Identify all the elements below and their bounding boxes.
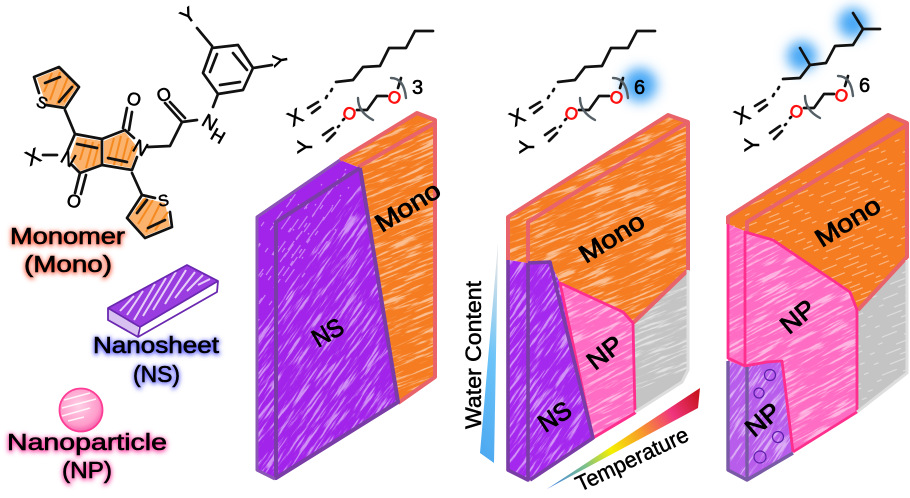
legend: monomer label: Monomer bbox=[10, 224, 125, 250]
formula panel 1: X and Y chains: O bbox=[385, 86, 404, 109]
atom labels: H bbox=[207, 124, 229, 148]
ring hatching bbox=[44, 72, 168, 232]
legend: nanoparticle label bbox=[7, 429, 167, 484]
legend: nanosheet label bbox=[93, 332, 220, 388]
atom labels: Y bbox=[177, 3, 200, 29]
region: grey empty bbox=[858, 262, 906, 409]
arrow: temperature gradient wedge bbox=[547, 388, 700, 489]
region: grey empty bbox=[633, 270, 688, 412]
formula panel 2: X and Y chains: 6 bbox=[634, 77, 645, 99]
legend: monomer label bbox=[10, 223, 125, 278]
label: NS: NS bbox=[307, 313, 349, 353]
atom labels: N bbox=[57, 147, 79, 172]
label: Mono: Mono bbox=[370, 176, 446, 238]
formula panel 3: branched X and Y chains: X bbox=[731, 102, 754, 129]
phase diagram 2 bbox=[508, 115, 688, 480]
atom labels: N bbox=[129, 136, 151, 161]
legend: monomer label: (Mono) bbox=[24, 251, 112, 277]
formula panel 1: X and Y chains: Y bbox=[294, 140, 317, 154]
atom labels: S bbox=[34, 94, 50, 113]
atom labels: O bbox=[125, 88, 143, 111]
label: Mono: Mono bbox=[574, 207, 650, 269]
region: NP bbox=[728, 224, 857, 452]
formula panel 2: X and Y chains: X bbox=[506, 104, 529, 131]
formula panel 2: X and Y chains: Y bbox=[516, 140, 539, 154]
icon: nanosheet bbox=[108, 265, 218, 337]
formula panel 3: branched X and Y chains: O bbox=[787, 100, 806, 123]
legend: nanoparticle label: (NP) bbox=[62, 457, 112, 483]
icon: nanoparticle bbox=[60, 388, 102, 432]
molecular bonds bbox=[34, 28, 272, 238]
monomer molecule bbox=[22, 3, 293, 238]
atom labels: Y bbox=[269, 52, 293, 69]
formula panel 2: X and Y chains: O bbox=[607, 86, 626, 109]
region: NS bbox=[508, 260, 593, 480]
label: NP: NP bbox=[581, 330, 629, 376]
label: small NP: NP bbox=[740, 397, 786, 443]
edges bbox=[508, 115, 688, 480]
atom labels: O bbox=[154, 83, 174, 106]
phase diagram 3 bbox=[726, 113, 909, 482]
legend: nanosheet label: (NS) bbox=[133, 361, 180, 387]
formula panel 2: X and Y chains bbox=[506, 31, 657, 154]
edges bbox=[728, 115, 907, 480]
hatched orange rings bbox=[37, 69, 170, 236]
atom labels: S bbox=[157, 192, 170, 211]
formula panel 1: X and Y chains: X bbox=[284, 104, 307, 131]
formula panel 1: X and Y chains: O bbox=[340, 102, 359, 125]
legend: monomer label: Monomer bbox=[10, 223, 125, 249]
region: NS bbox=[258, 160, 396, 477]
label: Water Content: Water Content bbox=[461, 281, 486, 429]
legend: nanoparticle label: Nanoparticle bbox=[7, 430, 167, 456]
formula panel 1: X and Y chains bbox=[284, 31, 433, 154]
atom labels: O bbox=[65, 190, 83, 213]
label: Temperature: Temperature bbox=[571, 422, 692, 497]
legend: monomer label: (Mono) bbox=[24, 252, 112, 278]
region: NP bbox=[560, 283, 635, 438]
formula panel 3: branched X and Y chains: O bbox=[832, 84, 851, 107]
formula panel 3: branched X and Y chains: Y bbox=[741, 138, 764, 152]
legend: nanosheet label: Nanosheet bbox=[93, 333, 220, 359]
legend: nanosheet label: Nanosheet bbox=[93, 332, 220, 358]
label: NP: NP bbox=[775, 294, 821, 340]
atom labels bbox=[22, 3, 293, 213]
small nanoparticle circles bbox=[754, 370, 784, 463]
arrow: water content gradient wedge bbox=[480, 243, 498, 463]
formula panel 1: X and Y chains: 3 bbox=[412, 77, 423, 99]
formula panel 3: branched X and Y chains: 6 bbox=[859, 75, 870, 97]
formula panel 3: branched X and Y chains bbox=[731, 8, 880, 152]
atom labels: N bbox=[198, 111, 220, 136]
phase diagram 1 bbox=[241, 113, 446, 479]
legend: nanoparticle label: Nanoparticle bbox=[7, 429, 167, 455]
region: Mono bbox=[340, 113, 435, 403]
label: Mono: Mono bbox=[810, 191, 886, 253]
region: Mono bbox=[729, 117, 905, 308]
edges bbox=[257, 113, 435, 479]
legend: nanosheet label: (NS) bbox=[133, 362, 180, 388]
label: NS: NS bbox=[533, 396, 577, 438]
region: Mono bbox=[508, 115, 688, 323]
legend: nanoparticle label: (NP) bbox=[62, 458, 112, 484]
atom labels: X bbox=[22, 144, 44, 171]
region: NS with nanoparticles bbox=[728, 361, 793, 480]
formula panel 2: X and Y chains: O bbox=[562, 102, 581, 125]
